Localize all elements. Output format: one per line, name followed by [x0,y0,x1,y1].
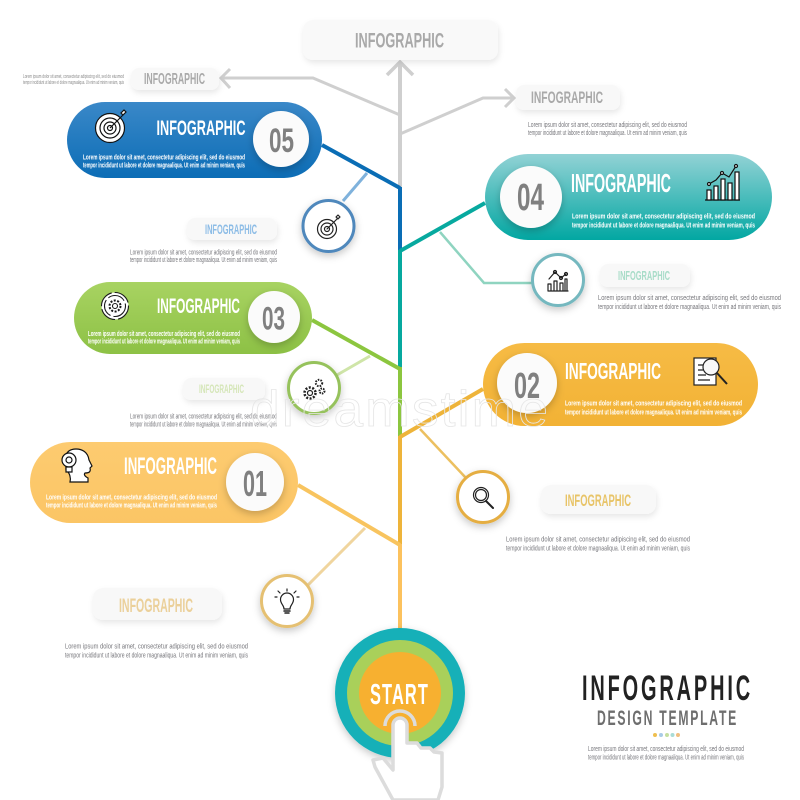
icon: pointing hand [373,711,442,800]
left grey text [23,74,124,86]
label 05 [187,218,277,240]
number badge 02 [497,353,557,413]
left grey text: tempor incididunt ut labore et dolore magnaaliqua. Ut enim ad minim veniam, quis [23,80,124,86]
number badge 05: 05 [269,122,294,160]
panel: step 04 [485,154,772,240]
heading 02: INFOGRAPHIC [565,358,661,384]
dots [653,733,680,737]
icon: head with bulb [62,449,92,482]
text 01 [46,494,217,510]
description text [588,746,744,762]
text 02 [565,400,742,416]
text block 01: tempor incididunt ut labore et dolore magnaaliqua. Ut enim ad minim veniam, quis [65,652,248,660]
branch 01 [298,485,400,545]
label 02: INFOGRAPHIC [565,491,631,510]
start button [335,628,465,758]
panel: step 01 [30,442,298,523]
text 01: tempor incididunt ut labore et dolore magnaaliqua. Ut enim ad minim veniam, quis [46,502,217,510]
circle icon 01 [262,576,312,626]
text 05: tempor incididunt ut labore et dolore magnaaliqua. Ut enim ad minim veniam, quis [83,162,245,170]
text block 02 [506,536,690,552]
number badge 03: 03 [262,300,285,336]
heading 04: INFOGRAPHIC [571,168,671,198]
text 03: Lorem ipsum dolor sit amet, consectetur adipiscing elit, sed do eiusmod [88,331,240,338]
right grey text: tempor incididunt ut labore et dolore magnaaliqua. Ut enim ad minim veniam, quis [528,130,687,137]
panel: step 03 [74,282,312,354]
label 05: INFOGRAPHIC [205,221,257,237]
label 01: INFOGRAPHIC [119,596,193,617]
heading 01: INFOGRAPHIC [124,453,217,480]
text 03: tempor incididunt ut labore et dolore magnaaliqua. Ut enim ad minim veniam, quis [88,338,240,346]
icon: bar chart [705,164,740,200]
text block 03 [130,414,277,428]
heading 05: INFOGRAPHIC [156,117,246,140]
label 02 [541,485,656,514]
left grey label [131,68,219,90]
left grey text: Lorem ipsum dolor sit amet, consectetur adipiscing elit, sed do eiusmod [23,74,124,80]
start label: START [370,679,429,711]
icon: document search [694,358,727,385]
sub-branch 03 [337,356,370,375]
right grey text: Lorem ipsum dolor sit amet, consectetur adipiscing elit, sed do eiusmod [528,122,687,129]
right grey text [528,122,687,137]
number badge 02: 02 [514,365,540,406]
label 04: INFOGRAPHIC [618,268,670,283]
text 02: Lorem ipsum dolor sit amet, consectetur adipiscing elit, sed do eiusmod [565,400,742,408]
right grey label [516,85,620,110]
number badge 04 [500,166,562,228]
sub-branch 01 [308,528,365,585]
number badge 03 [248,291,300,343]
text block 02: Lorem ipsum dolor sit amet, consectetur adipiscing elit, sed do eiusmod [506,536,690,544]
circle icon 04 [532,254,584,306]
number badge 04: 04 [517,177,544,219]
label 01 [93,588,222,620]
icon: cycle gear [102,292,128,320]
branch 03 [312,320,400,369]
sub-branch 04 [440,232,532,283]
panel: step 02 [483,343,758,426]
text block 03: tempor incididunt ut labore et dolore magnaaliqua. Ut enim ad minim veniam, quis [130,422,277,428]
heading 03: INFOGRAPHIC [157,295,240,318]
text block 05: tempor incididunt ut labore et dolore magnaaliqua. Ut enim ad minim veniam, quis [130,257,277,264]
grey arrow: right [400,89,514,134]
central trunk [398,64,402,632]
left grey label: INFOGRAPHIC [144,71,205,88]
text 03 [88,331,240,346]
circle icon 02 [458,472,508,522]
panel: step 05 [67,102,322,178]
icon: target [96,110,126,142]
text 05: Lorem ipsum dolor sit amet, consectetur adipiscing elit, sed do eiusmod [83,154,245,162]
label 03 [183,378,265,400]
text block 03: Lorem ipsum dolor sit amet, consectetur adipiscing elit, sed do eiusmod [130,414,277,420]
circle icon 05 [303,200,354,252]
number badge 01: 01 [243,463,267,504]
text block 01: Lorem ipsum dolor sit amet, consectetur adipiscing elit, sed do eiusmod [65,644,248,650]
text 05 [83,154,245,170]
text block 04 [598,295,781,311]
top label [303,20,498,60]
text block 02: tempor incididunt ut labore et dolore magnaaliqua. Ut enim ad minim veniam, quis [506,546,690,552]
number badge 05 [253,111,309,167]
grey arrow: left [221,69,400,115]
text block 01 [65,644,248,660]
branch 05 [322,145,400,188]
text 01: Lorem ipsum dolor sit amet, consectetur adipiscing elit, sed do eiusmod [46,494,217,502]
text block 05 [130,250,277,264]
branch 04 [400,203,485,251]
watermark: dreamstime [250,381,550,437]
branch 02 [400,389,483,437]
number badge 01 [226,453,284,511]
grey arrow: top [387,62,413,75]
label 04 [600,264,690,287]
circle icon 03 [288,362,340,414]
sub-branch 02 [420,429,466,478]
label 03: INFOGRAPHIC [199,382,244,396]
sub-branch 05 [343,173,367,201]
top label: INFOGRAPHIC [355,30,444,52]
text block 05: Lorem ipsum dolor sit amet, consectetur adipiscing elit, sed do eiusmod [130,250,277,256]
right grey label: INFOGRAPHIC [531,88,603,107]
text 04 [572,214,755,230]
